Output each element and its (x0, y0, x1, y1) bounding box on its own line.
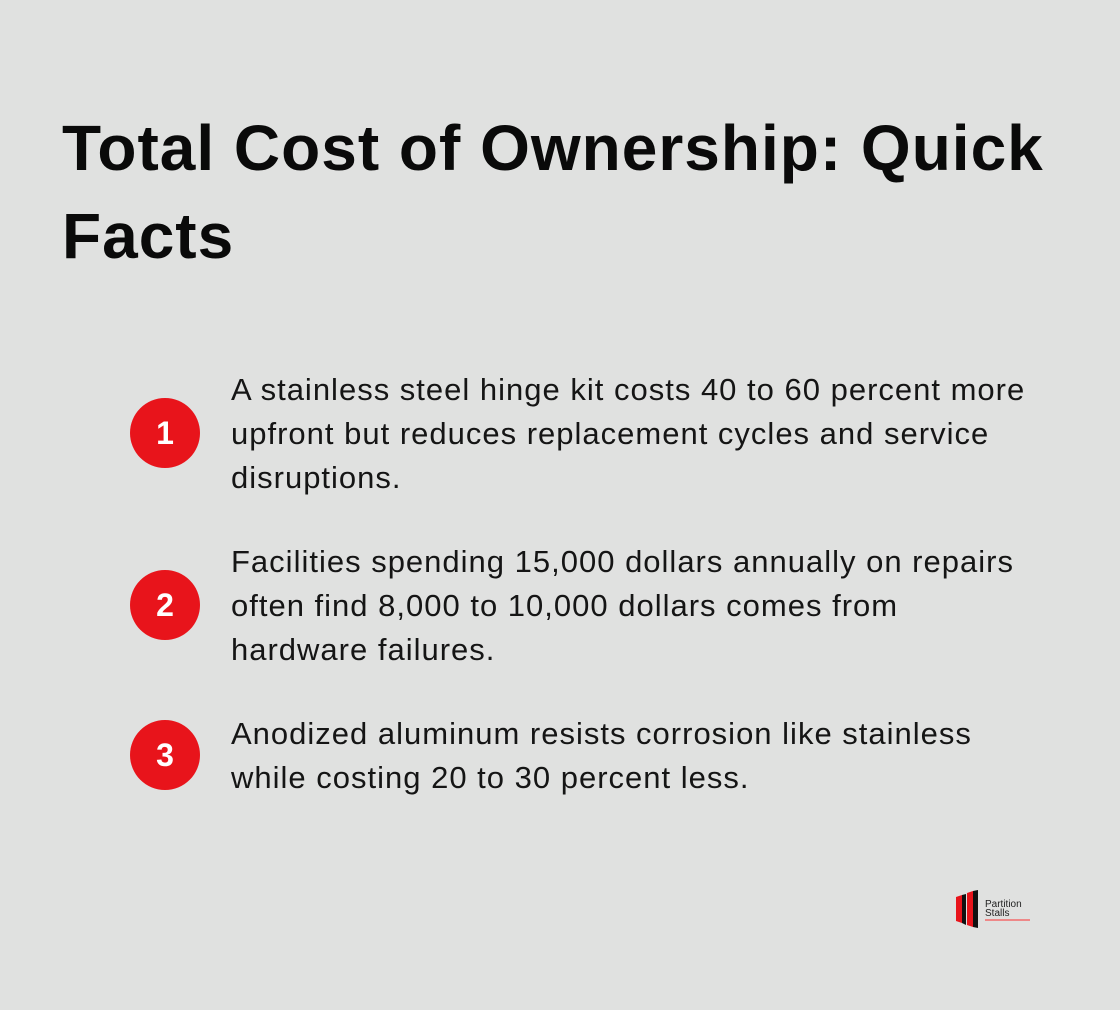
icon: number 3: 3 (156, 737, 174, 773)
title (62, 112, 1044, 272)
item 3 (130, 716, 972, 795)
title: Facts (62, 200, 234, 272)
item 2 (130, 544, 1014, 667)
icon: number 1 (130, 398, 200, 468)
icon: number 2: 2 (156, 587, 174, 623)
text 2: Facilities spending 15,000 dollars annually on repairs (231, 544, 1014, 579)
text 1: disruptions. (231, 460, 402, 495)
logo: Stalls (985, 908, 1009, 919)
text 3: Anodized aluminum resists corrosion like stainless (231, 716, 972, 751)
logo: Partition (985, 899, 1022, 910)
icon: number 3 (130, 720, 200, 790)
text 2: often find 8,000 to 10,000 dollars comes from (231, 588, 898, 623)
text 1: upfront but reduces replacement cycles and service (231, 416, 989, 451)
icon: number 2 (130, 570, 200, 640)
text 2: hardware failures. (231, 632, 495, 667)
title: Total Cost of Ownership: Quick (62, 112, 1044, 184)
text 1: A stainless steel hinge kit costs 40 to 60 percent more (231, 372, 1025, 407)
icon: number 1: 1 (156, 415, 174, 451)
text 3 (231, 716, 972, 795)
text 3: while costing 20 to 30 percent less. (231, 760, 750, 795)
item 1 (130, 372, 1025, 495)
text 2 (231, 544, 1014, 667)
logo (956, 890, 1030, 928)
text 1 (231, 372, 1025, 495)
